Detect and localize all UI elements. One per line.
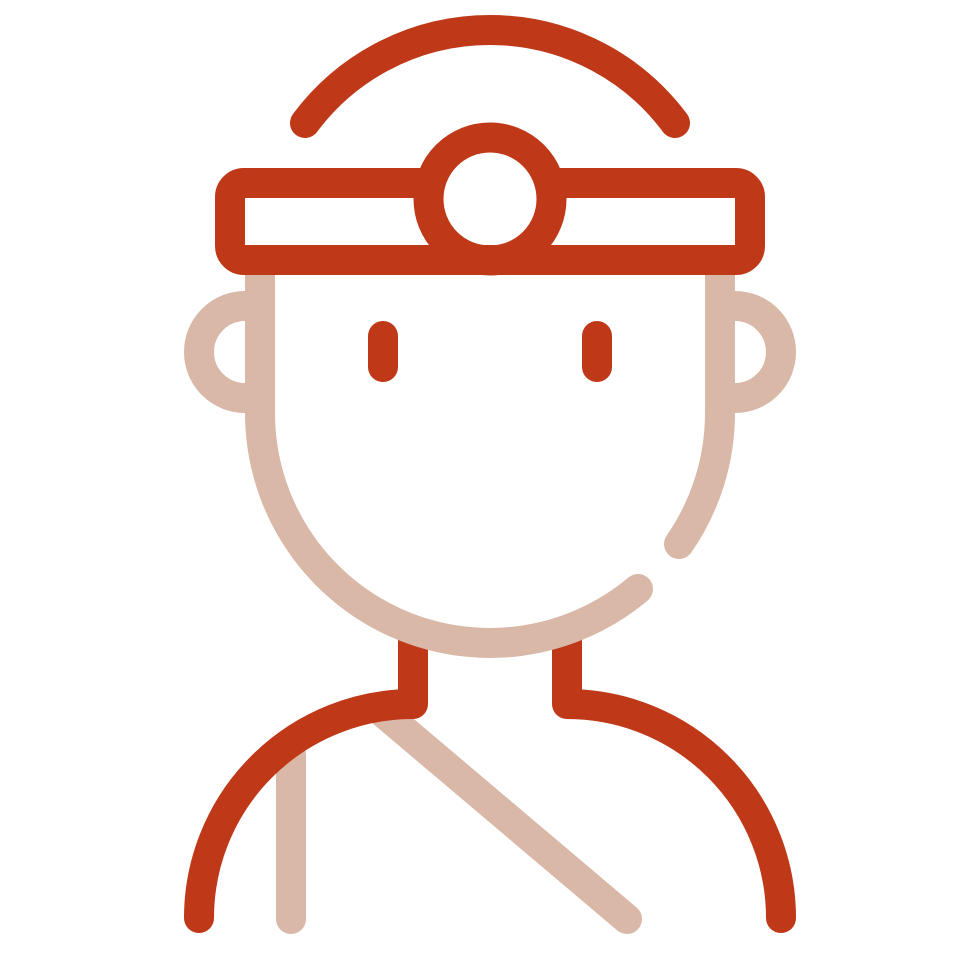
headband with lamp — [230, 138, 750, 260]
face outline and ears — [199, 262, 781, 643]
eyes — [383, 336, 597, 367]
lamp arc above headband — [305, 30, 675, 123]
neck and shoulders — [184, 640, 796, 933]
garment lines — [291, 710, 627, 919]
